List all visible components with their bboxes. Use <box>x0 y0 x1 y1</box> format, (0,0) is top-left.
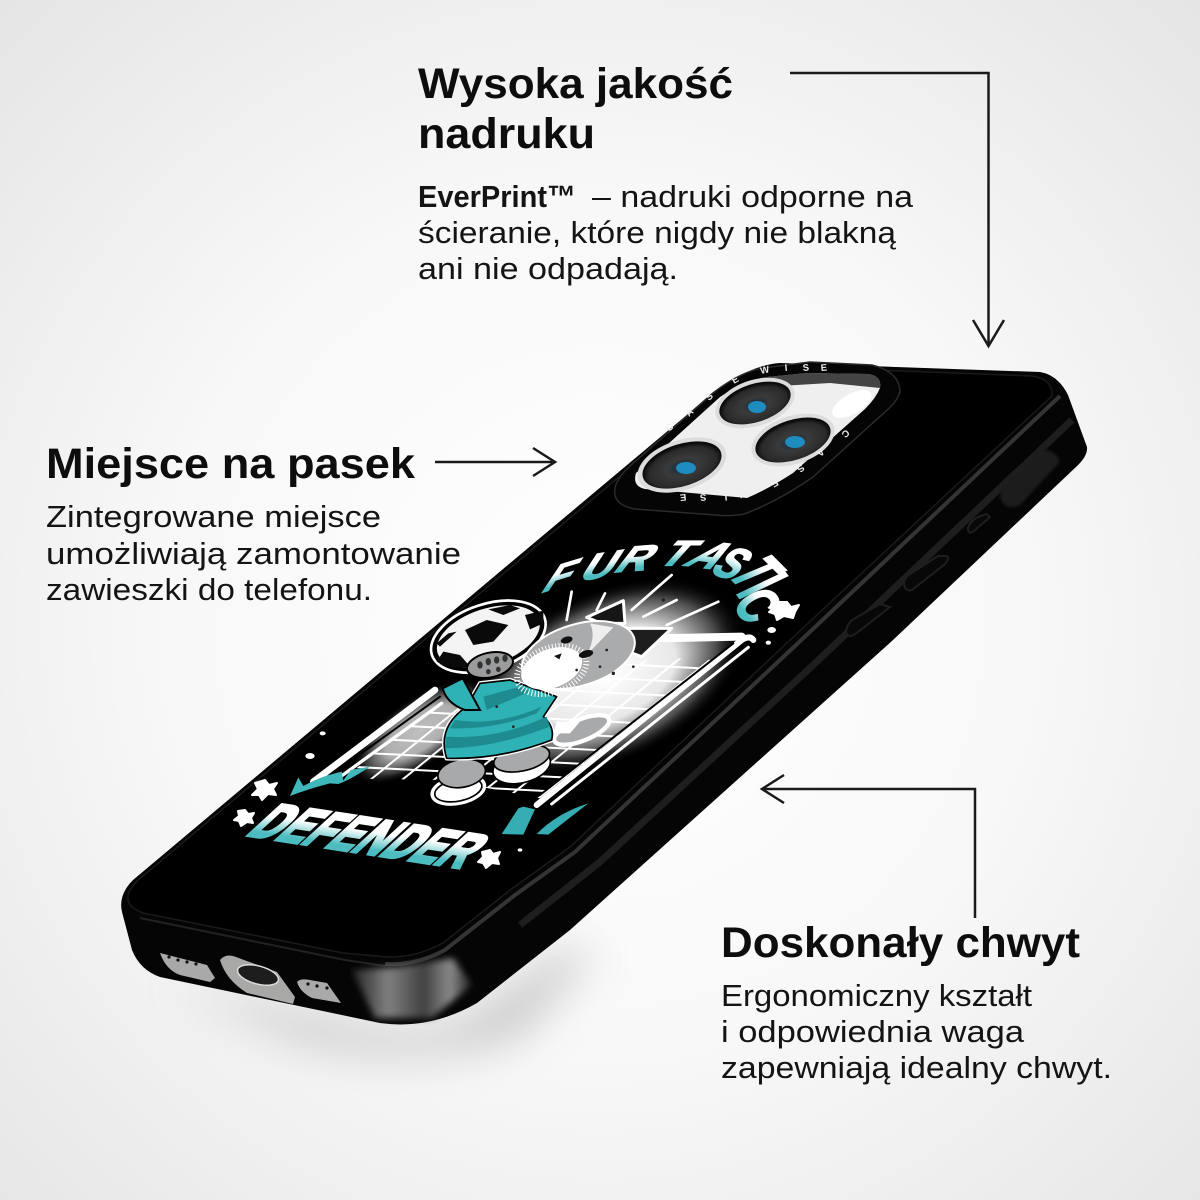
bottom corner gloss <box>352 958 472 1018</box>
cat arm right <box>550 709 613 751</box>
text: grip: Ergonomiczny kształt <box>721 978 1032 1013</box>
lens left <box>631 427 733 503</box>
camera bumper ring <box>615 362 900 516</box>
arrow: strap callout <box>435 448 555 476</box>
art title bottom: DEFENDER <box>234 794 504 878</box>
cat jersey <box>444 680 557 758</box>
rays <box>567 575 718 625</box>
grass right <box>502 803 588 835</box>
text: grip: i odpowiednia waga <box>721 1014 1025 1049</box>
side switch bump <box>1000 450 1060 507</box>
cat shoes and legs <box>430 740 554 808</box>
text: print quality: EverPrint™ <box>418 179 576 214</box>
art title top: U <box>571 541 632 590</box>
cat arm left <box>443 678 480 710</box>
art title top: F <box>534 549 590 602</box>
dots <box>305 610 776 852</box>
top inner shadow <box>730 373 880 398</box>
arrow: grip callout <box>762 775 975 918</box>
goal net <box>356 658 711 798</box>
side buttons <box>846 514 990 636</box>
phone drop shadow <box>170 945 590 1054</box>
heading: print quality: nadruku <box>418 110 595 158</box>
left glow <box>335 658 505 805</box>
printed back face <box>128 367 1052 957</box>
heading: strap slot: Miejsce na pasek <box>46 440 415 488</box>
text: strap slot: umożliwiają zamontowanie <box>46 536 461 571</box>
art title top: S <box>700 538 765 589</box>
text: print quality <box>418 179 914 286</box>
art title top: T <box>648 533 711 573</box>
text: grip: zapewniają idealny chwyt. <box>721 1050 1112 1085</box>
camera island <box>615 362 900 516</box>
text: print quality: – nadruki odporne na <box>592 179 914 214</box>
lens middle <box>745 404 841 476</box>
case silhouette <box>121 363 1087 1024</box>
ring lettering bottom: CASEWISE <box>679 427 851 503</box>
heading: grip: Doskonały chwyt <box>721 919 1080 967</box>
artwork <box>290 574 776 852</box>
camera glass <box>635 373 880 498</box>
art title top: T <box>713 549 800 595</box>
flash <box>828 384 876 424</box>
football <box>422 587 555 686</box>
text: grip <box>721 978 1112 1085</box>
phone case <box>121 363 1087 1024</box>
speckle <box>495 592 681 728</box>
art title top: C <box>720 578 795 633</box>
cat ears <box>587 601 672 657</box>
goal frame <box>313 637 753 805</box>
art title top <box>534 533 802 633</box>
grass left <box>290 767 370 796</box>
glow behind cat <box>438 538 776 816</box>
heading: print quality <box>418 60 733 158</box>
cat paw <box>465 648 515 682</box>
text: strap slot: zawieszki do telefonu. <box>46 572 372 607</box>
lens top <box>709 368 801 438</box>
right speaker <box>297 979 341 1003</box>
ring lettering top: CASEWISE <box>664 362 828 434</box>
arrow: top callout <box>790 73 1004 346</box>
charging port <box>220 956 295 1004</box>
cat head <box>510 609 643 703</box>
side rails <box>140 396 1072 966</box>
art title top: R <box>606 537 670 581</box>
left speaker <box>160 953 215 982</box>
text: strap slot <box>46 499 461 607</box>
text: strap slot: Zintegrowane miejsce <box>46 499 381 534</box>
heading: print quality: Wysoka jakość <box>418 60 733 108</box>
text: print quality: ani nie odpadają. <box>418 251 678 286</box>
stars <box>234 602 799 868</box>
art title top: A <box>672 535 750 576</box>
art title top: I <box>721 564 802 607</box>
text: print quality: ścieranie, które nigdy nie blakną <box>418 215 897 250</box>
